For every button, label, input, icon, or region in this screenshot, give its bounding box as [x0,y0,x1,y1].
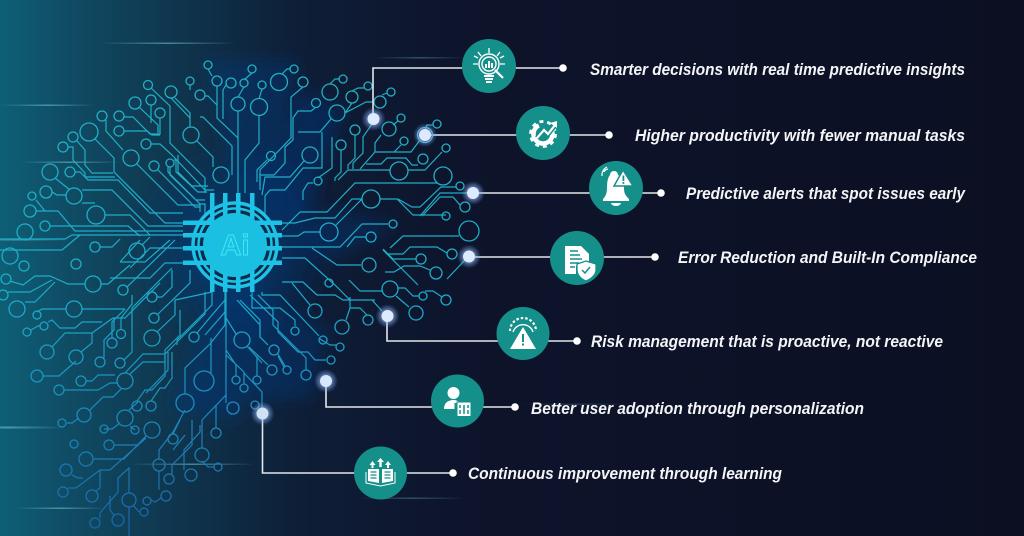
label: higher productivity: Higher productivity with fewer manual tasks [635,127,965,145]
connector 5 [387,316,581,345]
icon: bell with warning triangle [602,167,633,206]
badge: user adoption [431,374,484,428]
label: error reduction: Error Reduction and Built-In Compliance [678,249,977,267]
connector 7 [262,413,457,477]
badge: compliance document [550,231,604,285]
icon: person with building [444,387,471,416]
icon: document with shield [565,246,596,281]
badge: continuous learning [354,446,407,500]
label: predictive alerts: Predictive alerts that spot issues early [686,185,966,203]
connector 3 [473,189,665,197]
badge: productivity gear [516,106,570,160]
connector 2 [425,131,613,139]
label: smarter decisions: Smarter decisions with real time predictive insights [590,61,965,79]
icon: gear with arrow [530,121,557,147]
light streaks [0,42,630,509]
icon: lightbulb with magnifier [473,48,505,83]
label: risk management: Risk management that is proactive, not reactive [591,333,943,351]
circuit board brain traces [0,69,468,536]
connector 1 [373,64,567,119]
AI chip [183,193,282,292]
badge: predictive insights lightbulb [462,39,516,93]
chip backing disc [194,204,276,286]
glowing nodes [250,107,485,426]
connector 6 [326,381,519,411]
circuit nodes [0,61,479,528]
label: continuous improvement: Continuous improvement through learning [468,465,782,483]
connector 4 [469,253,659,261]
label: user adoption: Better user adoption through personalization [531,400,864,418]
icon: gear with warning triangle [510,318,536,349]
badge: risk management [496,307,550,360]
Ai label: Ai [220,230,250,262]
blue glow behind circuit [130,60,400,420]
badge: predictive alert bell [589,161,643,215]
chip core [203,213,267,277]
chip rings [193,203,277,287]
chip pins [183,193,282,292]
icon: open book with arrows [366,458,395,486]
